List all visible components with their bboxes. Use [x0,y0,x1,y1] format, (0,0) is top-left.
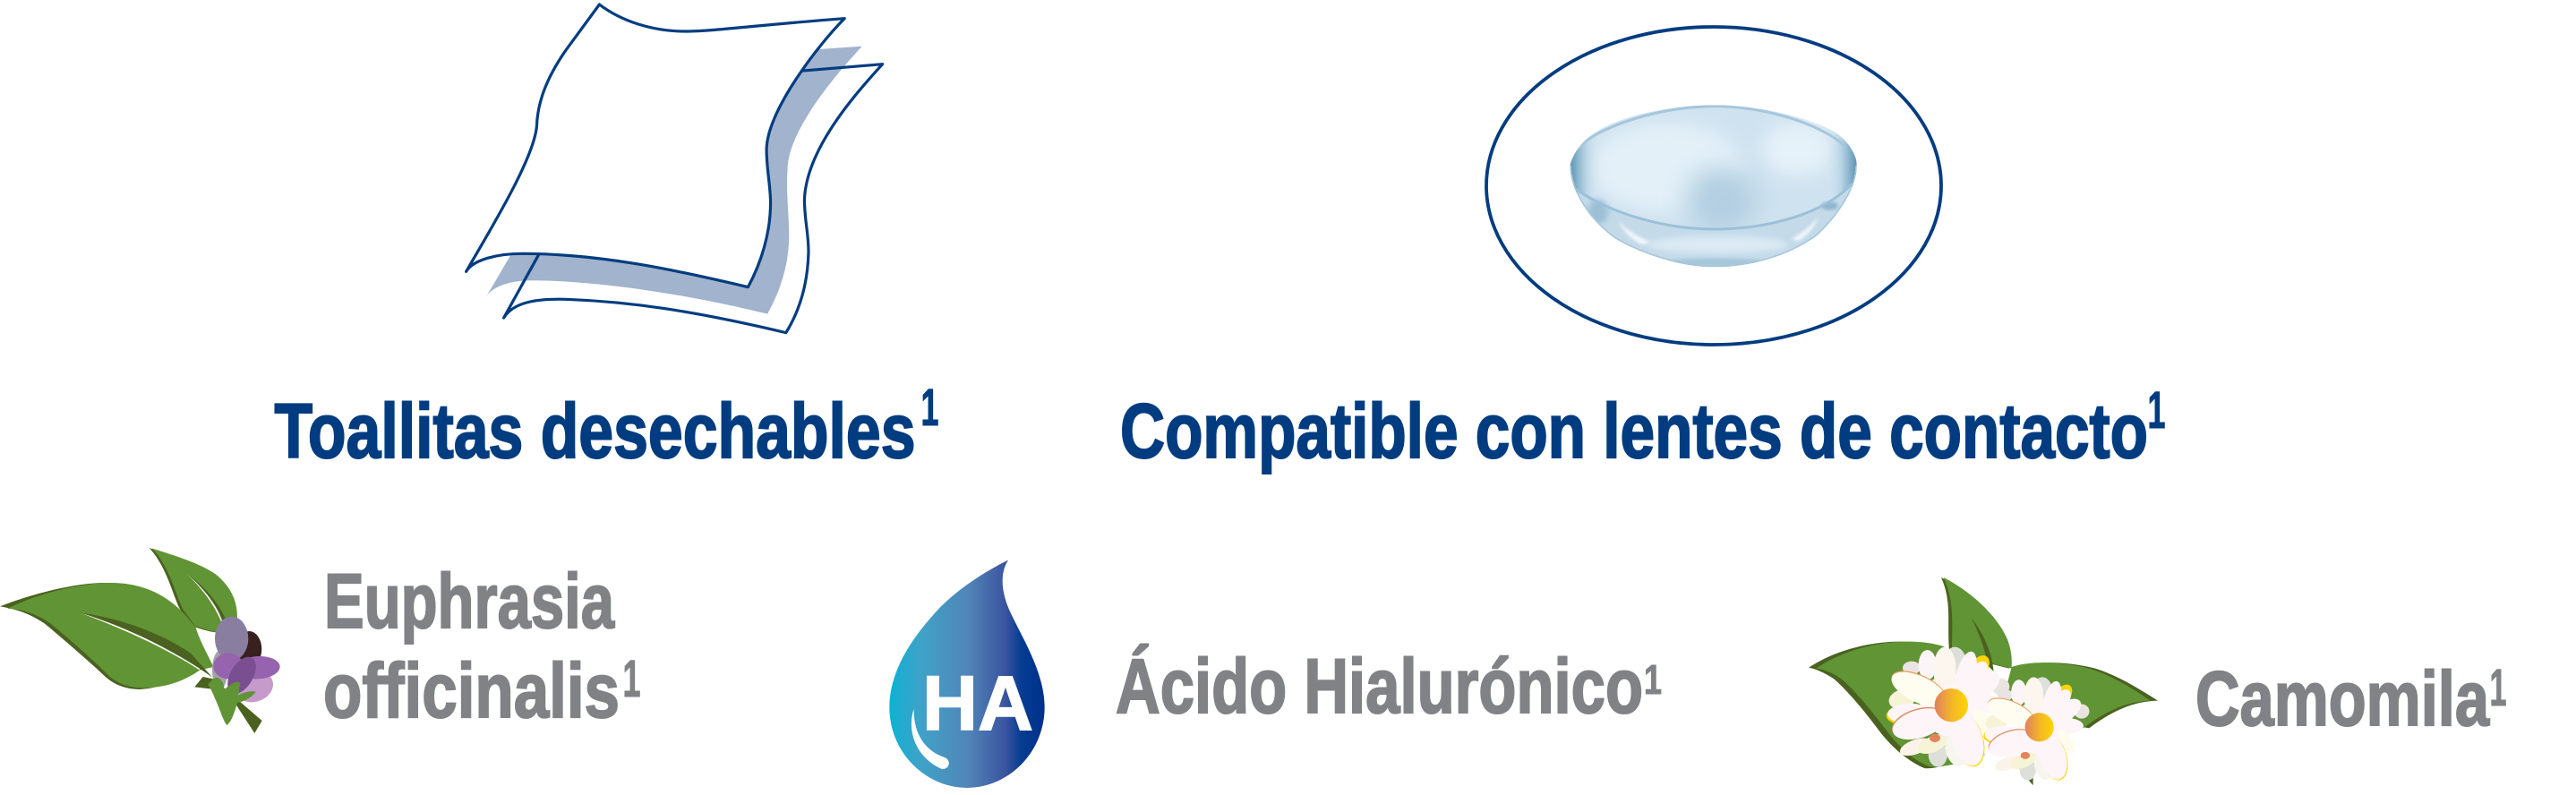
icon: hyaluronic acid drop: HA [922,661,1033,747]
text: Camomila: Camomila [2195,656,2490,742]
right leaf [1999,662,2158,728]
text: Ácido Hialurónico: 1 [1644,656,1662,703]
text: Euphrasia officinalis: 1 [623,650,641,708]
text: Euphrasia officinalis [323,559,641,734]
flower petals [212,617,280,706]
large leaf [0,583,213,689]
stem [194,677,262,733]
sepals [208,678,256,725]
flower left [1886,647,2009,771]
icon: chamomile flowers [1809,577,2158,785]
heading: Compatible con lentes de contacto: 1 [2147,381,2165,440]
icon: disposable wipes [466,4,883,333]
icon: contact lens in circle [1486,27,1941,345]
icon: euphrasia plant [0,548,280,733]
heading: Toallitas desechables: Toallitas desechables [274,389,915,474]
heading: Toallitas desechables: 1 [920,379,938,437]
flower right [1983,677,2090,783]
left leaf [1809,642,1985,768]
small leaf [150,548,237,633]
text: Euphrasia officinalis: officinalis [323,648,620,734]
top leaf [1941,577,2012,671]
text: Euphrasia officinalis: Euphrasia [324,559,615,645]
text: Camomila: 1 [2489,659,2507,717]
stem tip [2017,767,2033,785]
icon: hyaluronic acid drop [889,560,1045,788]
text: Ácido Hialurónico: Ácido Hialurónico [1116,644,1643,730]
heading: Compatible con lentes de contacto: Compatible con lentes de contacto [1120,389,2148,474]
